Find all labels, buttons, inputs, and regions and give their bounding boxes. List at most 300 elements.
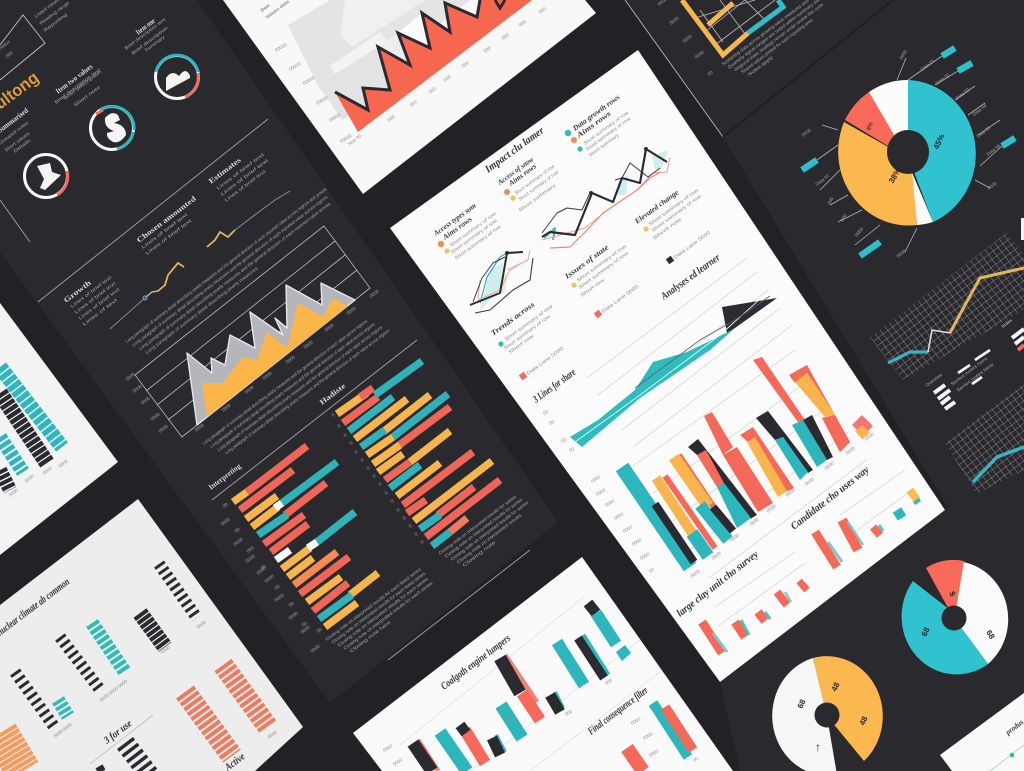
heading: area chart left: 3 Lines for share bbox=[531, 367, 578, 406]
text: badge captions: Item two values bbox=[54, 62, 94, 96]
text: bar chart axis labels: 0000 bbox=[590, 474, 602, 484]
text: bar chart axis labels: 0000 bbox=[749, 516, 760, 527]
chart: main pie bbox=[838, 80, 976, 226]
text: bar group labels: 0000 bbox=[256, 565, 267, 576]
axis labels: 0000 bbox=[303, 339, 314, 350]
text: axis labels: 000 bbox=[409, 99, 418, 108]
axis labels: 0000 bbox=[140, 395, 151, 406]
text: bar group labels: 0 bbox=[390, 498, 395, 504]
text: pie labels: 0000 bbox=[899, 49, 908, 60]
text: axis labels: 00000 bbox=[315, 95, 329, 106]
text: sparkline captions: Lines of brief text bbox=[220, 157, 270, 197]
text: note under right bars: Closing note on interpreted results for series bbox=[444, 497, 524, 559]
text: bar chart axis labels bbox=[590, 431, 875, 579]
chart: stripe columns bbox=[0, 564, 268, 771]
text: bar chart axis labels: 0000 bbox=[604, 498, 616, 508]
text: sheet notes: Notes apply bbox=[747, 54, 775, 77]
chart: right bar group bbox=[337, 361, 500, 546]
text: bar chart axis labels: 0000 bbox=[690, 568, 701, 579]
text: axis labels: 00 bbox=[707, 69, 714, 77]
text: bar group labels: 0 bbox=[354, 449, 359, 455]
text: axis labels: 0000 bbox=[682, 33, 693, 44]
text: paragraph above chart: Long paragraph of summary detail describing yearly measures bbox=[144, 265, 259, 355]
text: paragraph above chart: Long paragraph of summary detail describing yearly measures and the general direction of each reported value across regions bbox=[131, 194, 329, 348]
text: paragraph above chart: Long paragraph of summary detail describing yearly measures and the general direction of each reported value across bbox=[138, 201, 332, 351]
text: axis labels: 000 bbox=[604, 677, 614, 686]
text: axis labels: 00000 bbox=[288, 61, 302, 72]
legend: mini keys: Data Lane 0000 bbox=[526, 346, 565, 376]
heading: Impact clu lamer bbox=[483, 125, 547, 176]
text block: access: Short summary of row bbox=[518, 169, 560, 202]
text: axis labels: 0000 bbox=[669, 15, 680, 26]
text: paragraph below chart: Long paragraph of summary detail describing yearly measures and the general direction of each value across regions bbox=[202, 318, 369, 446]
chart: teal area: 00 bbox=[560, 437, 567, 444]
text: pie labels bbox=[801, 49, 1002, 259]
panel: lower right dark ground bbox=[720, 470, 1024, 771]
panel: lower middle white sheet bbox=[353, 557, 733, 771]
text: axis labels: 000 bbox=[387, 114, 396, 123]
slice labels: 48 bbox=[858, 714, 870, 727]
text: bar group labels: 0000 bbox=[288, 610, 299, 621]
text: pie labels: 0000 bbox=[896, 248, 907, 259]
text: bar group labels: 0000 bbox=[274, 592, 285, 603]
text: pie labels: Data 07 bbox=[815, 173, 831, 187]
text block: left top: Aims rows bbox=[440, 214, 474, 242]
text: intro notes: Short values bbox=[4, 130, 31, 153]
text: bar group labels: 0000 bbox=[300, 624, 311, 635]
panel: main white sheet bbox=[390, 50, 945, 682]
slice: yellow bbox=[813, 656, 883, 761]
text: bar group labels: 0000 bbox=[310, 643, 321, 654]
text: paragraph above chart: Long paragraph of summary detail describing yearly measures and the general direction of each reported value across regions and groups bbox=[125, 186, 328, 344]
text: sparkline captions: Growth bbox=[62, 278, 94, 305]
text block: left top: Short summary of row bbox=[450, 217, 499, 255]
text block: right: Short summary of row bbox=[648, 187, 700, 227]
text: bar group labels: 0 bbox=[360, 457, 365, 463]
heading: lower right mini chart: Candidate cho uses way bbox=[789, 464, 872, 532]
panel: lower left light sheet bbox=[0, 499, 303, 771]
chart: small sparkline B bbox=[207, 191, 290, 247]
legend: small white bars: Overview bbox=[925, 372, 943, 388]
text block: right bbox=[632, 187, 703, 241]
heading: lower sub chart: 3 for use bbox=[102, 718, 135, 747]
text block: right top: Short summary of row bbox=[585, 116, 632, 152]
text: badge captions: Brief description text bbox=[54, 67, 102, 105]
slice: teal bbox=[908, 80, 976, 222]
panel: top right dark sheet bbox=[625, 0, 1024, 560]
text: bar group labels: 00 bbox=[288, 600, 295, 608]
text: bar group labels: 0 bbox=[420, 539, 425, 545]
text: column labels: 0000 bbox=[267, 729, 278, 740]
text: axis labels bbox=[274, 6, 547, 147]
chart: right bars bbox=[627, 703, 693, 771]
text: badge captions: Brief description bbox=[63, 69, 103, 101]
slice: white bbox=[954, 562, 1008, 664]
text: pie labels: 0000 bbox=[854, 226, 865, 238]
text: axis labels bbox=[657, 0, 714, 77]
text: axis labels: 0000 bbox=[694, 49, 705, 60]
chart: pie lower right B bbox=[772, 656, 883, 771]
pie callouts bbox=[802, 48, 1015, 256]
text: bar chart axis labels: 0000 bbox=[639, 551, 651, 561]
text: sparkline captions: Lines of brief text bbox=[145, 217, 193, 256]
text: bar group labels: 00 bbox=[316, 626, 323, 634]
hole bbox=[814, 702, 840, 728]
text: note under left bars bbox=[325, 566, 438, 661]
text: bar group labels: 000 bbox=[246, 545, 255, 554]
axis labels bbox=[125, 288, 380, 434]
text: sparkline captions: Lines of brief text bbox=[141, 211, 189, 250]
text: header notes: Data bbox=[260, 3, 271, 13]
text: bar chart axis labels: 0000 bbox=[613, 511, 625, 521]
icon: cloud badge bbox=[156, 55, 198, 98]
text: sparkline captions: Lines of text bbox=[82, 297, 119, 327]
text: note under left bars: Closing note on interpreted results for each listed series bbox=[331, 571, 427, 645]
text: bar group labels: 0 bbox=[384, 490, 389, 496]
chart: mountain area chart bbox=[125, 226, 380, 437]
text: bar group labels: 0000 bbox=[245, 553, 256, 564]
slice: white bbox=[772, 658, 837, 771]
chart: teal area: 00 bbox=[568, 446, 575, 453]
text: note under right bars: Closing note on interpreted results bbox=[456, 512, 523, 565]
text: header notes: Values data bbox=[265, 0, 290, 20]
text: axis labels: 00000 bbox=[339, 133, 353, 144]
text: bar group labels: 0 bbox=[349, 440, 354, 446]
text block: right top: Short summary bbox=[588, 132, 620, 158]
axis labels: 0000 bbox=[132, 383, 143, 394]
chart: small sparkline A bbox=[110, 263, 184, 329]
text: bar group labels: 0000 bbox=[220, 516, 231, 527]
text: axis labels: 0000 bbox=[630, 716, 642, 726]
heading: right bars: Hadiste bbox=[318, 381, 348, 407]
text: bar group labels: 0000 bbox=[233, 536, 244, 547]
slice labels: 8% bbox=[866, 121, 875, 132]
text: sparkline captions: Lines of brief text bbox=[70, 274, 113, 309]
legend: small white bars bbox=[925, 350, 995, 409]
text: pie labels: 0000 bbox=[987, 180, 998, 191]
legend: right edge bars: Index bbox=[1001, 317, 1014, 329]
text: bar group labels: 0 bbox=[378, 481, 383, 487]
text: bar group labels: 0 bbox=[372, 473, 377, 479]
legend: small white bars: Series notes here bbox=[956, 361, 995, 393]
text: badge captions: Summary bbox=[144, 34, 166, 53]
text: axis labels: 000 bbox=[428, 86, 437, 95]
text: bar chart axis labels: 0000 bbox=[622, 524, 634, 534]
gray background bands bbox=[288, 0, 470, 100]
panel: corner white sheet bbox=[940, 693, 1024, 771]
text: paragraph below chart: Long paragraph of summary detail describing yearly measures and the general direction of each value across regions bbox=[224, 328, 391, 455]
chart: pie lower right A bbox=[902, 560, 1008, 674]
text: bar chart axis labels: 0000 bbox=[631, 537, 643, 547]
chart: red zigzag area bbox=[335, 0, 532, 132]
axis labels: 0000 bbox=[244, 384, 255, 395]
callout box bbox=[0, 15, 45, 80]
text: sparkline captions: Lines of brief text bbox=[216, 151, 266, 191]
text: note under left bars: Closing note here bbox=[349, 619, 392, 654]
text block: right top bbox=[565, 92, 632, 158]
text block: lower left: Short summary of row bbox=[503, 313, 552, 351]
text: pie labels: Data 01 bbox=[920, 58, 936, 72]
text: sparkline captions: Lines of brief text bbox=[78, 286, 121, 321]
text: pie labels: Data 03 bbox=[955, 87, 971, 101]
text: badge captions: Brief description text bbox=[124, 16, 167, 51]
text: axis labels: 0000 bbox=[392, 757, 404, 767]
text: sparkline captions: Estimates bbox=[207, 155, 243, 186]
text: sparkline captions: Lines of brief text bbox=[224, 168, 267, 203]
slice: teal bbox=[902, 581, 988, 674]
axis labels: 0000 bbox=[369, 288, 380, 299]
slice: white upper bbox=[869, 80, 908, 140]
slice labels: 68 bbox=[920, 625, 932, 638]
icon: person badge bbox=[24, 154, 68, 198]
axis labels: 0000 bbox=[221, 402, 232, 413]
text: column labels: 0000 0000 0000 bbox=[99, 679, 128, 703]
text: axis labels: 000 bbox=[564, 708, 574, 717]
text: column labels: 0000 0000 bbox=[53, 721, 73, 739]
chart: secondary line graph bbox=[470, 250, 533, 313]
text: pie labels: Data 04 bbox=[972, 103, 988, 117]
chart: teal area: 00 bbox=[542, 409, 549, 416]
text block: lower left: Short row bbox=[508, 333, 536, 355]
text: sheet notes: Regional index readings remain under review this cycle bbox=[733, 2, 825, 72]
text: axis labels: 00000 bbox=[302, 75, 316, 86]
text: axis labels: 00 bbox=[692, 756, 699, 763]
text block: right top: Data growth rows bbox=[570, 92, 622, 133]
text: paragraph below chart: Long paragraph of summary detail describing yearly measures and the general direction of each value across regions bbox=[209, 321, 376, 449]
slice labels: $ bbox=[947, 590, 957, 598]
panel: left white sheet bbox=[0, 303, 118, 555]
text: pie labels: 000 bbox=[840, 213, 848, 222]
slice labels: 38% bbox=[887, 167, 903, 185]
text block: center: Short row bbox=[580, 277, 606, 298]
text: pie labels: Data 02 bbox=[935, 72, 951, 86]
text block: access: Short summary bbox=[518, 182, 557, 213]
slice: yellow bbox=[838, 122, 917, 226]
text: axis labels: 00000 bbox=[328, 112, 342, 123]
chart: bars bbox=[413, 603, 631, 771]
axis labels: 0000 bbox=[194, 422, 205, 433]
text: bar group labels: 00 bbox=[260, 563, 267, 571]
heading: lower left mini chart: large clay unit cho survey bbox=[675, 549, 761, 619]
text: axis labels: 000 bbox=[538, 6, 547, 15]
text: bar chart axis labels: 0000 bbox=[766, 503, 777, 514]
text: column labels: 0000 bbox=[196, 619, 207, 630]
text: note under right bars: Closing note bbox=[462, 539, 497, 568]
text: axis labels bbox=[382, 677, 699, 767]
text: sheet notes: Shared values plotted for each reporting area bbox=[740, 17, 814, 75]
text block: center: Short summary of row bbox=[576, 243, 628, 283]
text: intro notes: Details bbox=[13, 137, 32, 154]
panel: central dark sheet bbox=[0, 0, 558, 703]
text: sparkline captions: Lines of brief text bbox=[74, 280, 117, 315]
chart: lower mesh line graph bbox=[945, 383, 1024, 500]
text: intro notes: Reading range bbox=[39, 0, 71, 26]
slice labels bbox=[920, 590, 997, 641]
text: bar group labels: 00 bbox=[222, 501, 229, 509]
text: pie labels: 000 bbox=[827, 196, 835, 206]
slice: white lower bbox=[911, 170, 933, 225]
pie hole bbox=[887, 130, 929, 174]
text: bar chart axis labels: 0000 bbox=[845, 445, 856, 456]
legend: small white bars: Series notes here bbox=[950, 355, 989, 387]
chart: main bar chart bbox=[622, 357, 868, 567]
text block: center bbox=[562, 242, 630, 298]
axis labels: 0000 bbox=[262, 370, 273, 381]
text: column labels: 0000 bbox=[160, 644, 171, 655]
text block: access: Access of snow bbox=[495, 154, 536, 187]
axis labels: 0000 bbox=[324, 322, 335, 333]
heading: sub chart: Final consequence filter bbox=[586, 685, 651, 738]
text: bar chart axis labels: 00 bbox=[648, 567, 655, 574]
panel: top white sheet bbox=[223, 0, 596, 194]
text: stripe labels: 0000 bbox=[8, 487, 19, 498]
area: yellow peaks bbox=[202, 298, 348, 417]
text block: right: Short row bbox=[652, 216, 683, 241]
heading: Coalgoth engine lumpers bbox=[439, 633, 513, 692]
text: bar group labels: 0000 bbox=[264, 573, 275, 584]
text: bar chart axis labels: 0000 bbox=[711, 550, 722, 561]
text: axis labels: 0000 bbox=[642, 731, 654, 741]
text: note under right bars: Closing note on interpreted results for series bbox=[438, 494, 518, 556]
text block: access: Aims rows bbox=[506, 161, 538, 188]
axis labels: 0000 bbox=[285, 354, 296, 365]
heading: area chart: Analyses ed learner bbox=[659, 252, 723, 303]
text block: center: Issues of state bbox=[562, 242, 611, 281]
text: badge captions: Item one bbox=[134, 16, 157, 37]
text: axis labels: 000 bbox=[501, 32, 510, 41]
text: sheet notes bbox=[721, 0, 837, 86]
icon: S badge bbox=[90, 106, 134, 150]
text: pie labels: Data 06 bbox=[986, 143, 1002, 157]
text: sparkline captions bbox=[62, 151, 270, 327]
text block: left top: Short summary of row bbox=[449, 210, 498, 248]
axis labels: 0000 bbox=[346, 305, 357, 316]
text: bar group labels: 00 bbox=[274, 583, 281, 591]
text: axis labels: 0000 bbox=[648, 748, 660, 758]
text: axis labels: 000 bbox=[518, 19, 527, 28]
text: axis labels: 000 bbox=[443, 74, 452, 83]
text: axis labels: 000 bbox=[503, 714, 513, 723]
text block: access: Short summary of row bbox=[514, 163, 556, 196]
slice labels bbox=[866, 121, 947, 185]
text: bar group labels: 0 bbox=[396, 507, 401, 513]
text: column labels bbox=[53, 619, 278, 740]
text: intro notes bbox=[0, 0, 71, 154]
text: bar chart axis labels: 0000 bbox=[824, 460, 835, 471]
text: bar group labels: 0 bbox=[337, 423, 342, 429]
text: note under left bars: Closing note on interpreted results for each series bbox=[343, 580, 434, 651]
chart: upper mesh line graph bbox=[870, 233, 1024, 380]
text block: access bbox=[495, 154, 560, 213]
text: stripe labels: 0000 bbox=[24, 473, 35, 484]
text: bar chart axis labels: 0000 bbox=[595, 487, 607, 497]
text block: center: Short summary of row bbox=[578, 250, 630, 290]
slice labels: 68 bbox=[796, 697, 808, 710]
text: bar group labels: 0 bbox=[331, 412, 336, 418]
text: bar chart axis labels: 0000 bbox=[864, 431, 875, 442]
chart: teal area: 00 bbox=[548, 419, 555, 426]
text block: right top: Short summary of row bbox=[583, 110, 630, 146]
text block: right: Short summary of row bbox=[651, 193, 703, 233]
text: paragraph below chart: Long paragraph of summary detail describing yearly measures and the general direction of each value across regions bbox=[216, 324, 384, 452]
text: sparkline captions: Chosen amounted bbox=[135, 193, 199, 245]
axis labels: 0000 bbox=[158, 423, 169, 434]
text: intro notes: Reporting bbox=[43, 12, 68, 33]
slice labels: 68 bbox=[984, 628, 997, 641]
legend: right edge bars bbox=[1001, 218, 1024, 535]
heading: left bars: Interpreting bbox=[207, 461, 243, 492]
text: stripe labels bbox=[8, 458, 69, 498]
text: bar group labels: 00 bbox=[234, 526, 241, 534]
legend: mini keys: Data Lane 0000 bbox=[673, 230, 712, 260]
chart: lower left mini bars bbox=[702, 581, 807, 653]
text: note under right bars bbox=[438, 490, 537, 575]
chart: lower right mini bars bbox=[815, 490, 918, 567]
slice labels bbox=[796, 680, 870, 754]
text block: left top bbox=[431, 201, 503, 261]
axis labels: 0000 bbox=[125, 371, 136, 382]
legend: mini keys bbox=[519, 230, 712, 380]
text: bar group labels: 0 bbox=[408, 523, 413, 529]
text block: lower left: Short summary of row bbox=[504, 303, 554, 342]
text block: right top: Aims rows bbox=[574, 109, 613, 140]
grid lines bbox=[587, 258, 912, 627]
text: bar group labels: 0 bbox=[402, 515, 407, 521]
text block: right: Elevated change bbox=[632, 187, 681, 226]
chart: stacked stripes bbox=[0, 367, 62, 490]
area: gray peaks bbox=[187, 283, 355, 425]
text: axis labels: 0000 bbox=[382, 743, 394, 753]
chart: left bar group bbox=[233, 446, 378, 627]
chart: frame chart fragment bbox=[682, 0, 783, 55]
text: bar chart axis labels: 0000 bbox=[804, 476, 815, 487]
slice labels: 45% bbox=[932, 133, 947, 151]
axis labels: 0000 bbox=[150, 411, 161, 422]
text: badge captions: Brief description bbox=[131, 25, 169, 56]
text: bar chart axis labels: 0000 bbox=[785, 487, 796, 498]
text: bar chart axis labels: 0000 bbox=[729, 532, 740, 543]
text block: lower left: Trends across bbox=[489, 300, 536, 338]
callout box: 000 bbox=[5, 50, 14, 59]
text: axis labels: 00000 bbox=[274, 42, 288, 53]
text block: left top: Short summary of row bbox=[454, 223, 503, 261]
hole bbox=[942, 606, 966, 630]
text: bar group labels: 0 bbox=[366, 465, 371, 471]
text block: left top: Access types sum bbox=[431, 201, 478, 238]
text: bar group labels: 00 bbox=[301, 620, 308, 628]
text: pie labels: Data 05 bbox=[976, 125, 992, 139]
text: bar group labels bbox=[220, 412, 425, 654]
slice labels: ↑ bbox=[815, 740, 821, 754]
text: bar group labels: 0 bbox=[414, 531, 419, 537]
text: axis labels: Year 00 bbox=[347, 133, 362, 147]
chart: teal area bbox=[542, 290, 777, 453]
text: stripe labels: 0000 bbox=[42, 465, 53, 476]
text: note under right bars: Closing note on interpreted results for series bbox=[450, 500, 530, 562]
text: axis labels: 000 bbox=[483, 45, 492, 54]
text block: lower left bbox=[489, 300, 554, 355]
text: badge captions: Short note bbox=[73, 84, 102, 108]
slice: red bbox=[845, 92, 900, 146]
legend: mini keys: Data Lane 0000 bbox=[601, 284, 640, 314]
text: axis labels: 000 bbox=[461, 60, 470, 69]
slice: red bbox=[926, 560, 964, 615]
text: badge captions bbox=[54, 16, 169, 108]
text: stripe labels: 0000 bbox=[58, 458, 69, 469]
text: note under left bars: Closing note on interpreted results for each listed series bbox=[325, 566, 422, 642]
text: bar group labels: 0 bbox=[343, 432, 348, 438]
text: pie labels: 0000 bbox=[801, 127, 812, 138]
